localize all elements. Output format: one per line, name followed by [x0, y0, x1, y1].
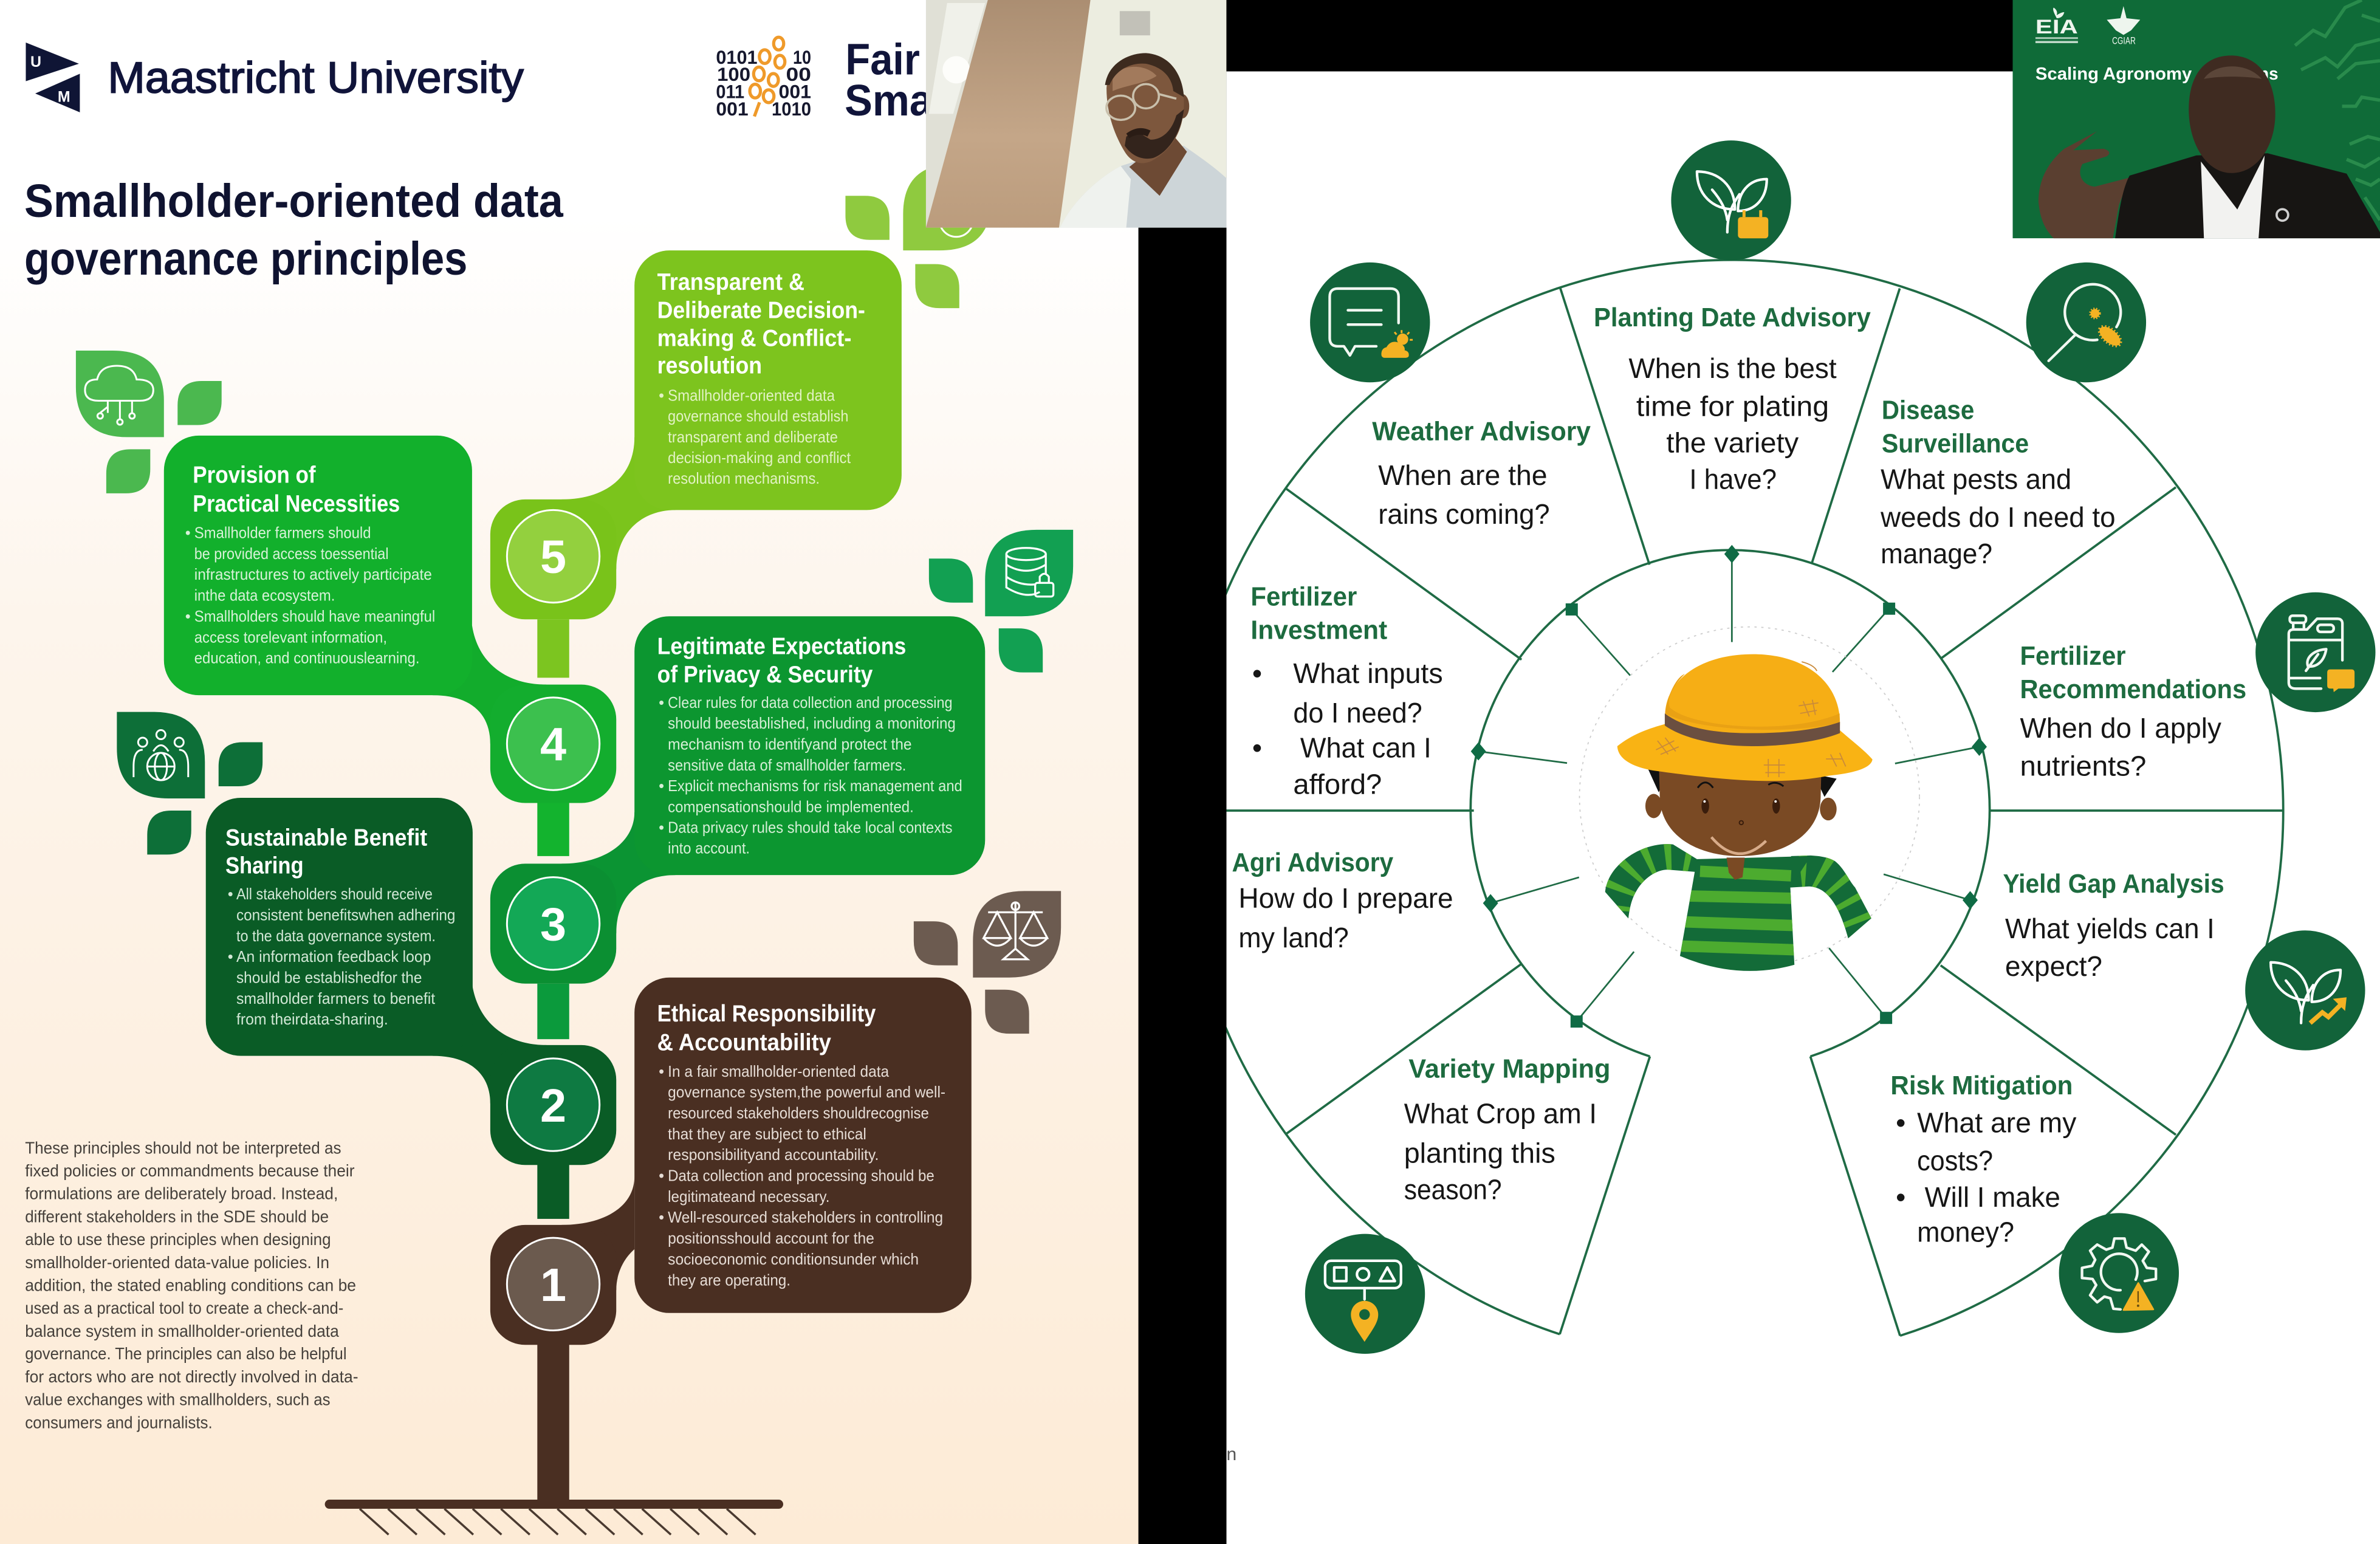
- body text: inthe data ecosystem.: [194, 588, 335, 605]
- section: fertilizer investment: Fertilizer: [1250, 582, 1357, 612]
- body text: be provided access toessential: [194, 546, 389, 563]
- section: planting date advisory: [1594, 303, 1871, 495]
- logos: EiA and CGIAR: EIA: [2035, 16, 2078, 38]
- section: disease surveillance: weeds do I need to: [1880, 501, 2116, 533]
- body text: All stakeholders should receive: [236, 886, 433, 903]
- text block: principles note: balance system in smallholder-oriented data: [25, 1322, 340, 1340]
- section: weather advisory: When are the: [1378, 459, 1548, 491]
- icon: database lock leaf: [929, 530, 1073, 673]
- body text: consistent benefitswhen adhering: [236, 907, 455, 924]
- body text: governance system,the powerful and well-: [668, 1084, 945, 1101]
- section: variety mapping: season?: [1404, 1173, 1502, 1205]
- body text: •: [659, 1209, 664, 1226]
- body text: compensationshould be implemented.: [668, 798, 914, 815]
- text block: principles note: used as a practical tool to create a check-and-: [25, 1299, 343, 1317]
- section: fertilizer recommendations: nutrients?: [2020, 750, 2146, 781]
- body text: Well-resourced stakeholders in controlling: [668, 1209, 943, 1226]
- logo: Maastricht University: [26, 43, 524, 112]
- principle 4: practical necessities: [76, 351, 616, 856]
- icon: risk mitigation: [2059, 1213, 2179, 1333]
- body text: should beestablished, including a monitoring: [668, 715, 956, 732]
- body text: that they are subject to ethical: [668, 1126, 866, 1143]
- body text: Smallholder-oriented data: [668, 387, 835, 404]
- section: risk mitigation: Will I make: [1925, 1181, 2060, 1213]
- logo: Maastricht University: Maastricht University: [108, 53, 524, 102]
- principle 2: sustainable benefit sharing: [117, 712, 616, 1219]
- section: weather advisory: rains coming?: [1378, 498, 1550, 530]
- body text: decision-making and conflict: [668, 450, 851, 467]
- section: weather advisory: [1372, 416, 1591, 530]
- section: planting date advisory: the variety: [1666, 427, 1799, 458]
- heading: [657, 634, 906, 688]
- body text: •: [659, 1063, 664, 1080]
- logo: Fair Smallholder binary: 00: [786, 63, 811, 85]
- body text: [659, 695, 962, 857]
- section: fertilizer recommendations: Recommendations: [2020, 674, 2246, 704]
- text block: principles note: governance. The principles can also be helpful: [25, 1344, 347, 1363]
- stray character at slide edge: n: [1226, 1444, 1236, 1464]
- heading: resolution: [657, 353, 762, 379]
- section: fertilizer investment: [1250, 582, 1443, 800]
- heading: Sharing: [225, 853, 304, 879]
- body text: •: [228, 886, 233, 903]
- body text: socioeconomic conditionsunder which: [668, 1251, 919, 1268]
- farmer right sleeve: [1790, 856, 1871, 938]
- section: agri advisory: Agri Advisory: [1232, 848, 1394, 877]
- body text: legitimateand necessary.: [668, 1189, 829, 1206]
- body text: from theirdata-sharing.: [236, 1011, 388, 1028]
- body text: positionsshould account for the: [668, 1230, 874, 1247]
- section: variety mapping: Variety Mapping: [1408, 1054, 1610, 1084]
- section: variety mapping: What Crop am I: [1404, 1098, 1597, 1130]
- section: risk mitigation: [1890, 1071, 2077, 1247]
- farmer left sleeve: [1605, 844, 1697, 919]
- heading: [193, 462, 400, 517]
- text block: principles note: addition, the stated enabling conditions can be: [25, 1275, 356, 1294]
- section: fertilizer investment: afford?: [1293, 768, 1382, 800]
- principle 5: transparent decision-making: [490, 164, 991, 678]
- section: agri advisory: How do I prepare: [1238, 882, 1453, 914]
- section: disease surveillance: What pests and: [1881, 463, 2071, 495]
- title: [24, 175, 564, 285]
- section: disease surveillance: Surveillance: [1882, 428, 2029, 458]
- section: yield gap analysis: Yield Gap Analysis: [2003, 869, 2224, 899]
- section: risk mitigation: Risk Mitigation: [1890, 1071, 2073, 1100]
- text block: principles note: value exchanges with smallholders, such as: [25, 1390, 331, 1409]
- body text: •: [659, 1167, 664, 1184]
- section: risk mitigation: What are my: [1917, 1107, 2077, 1139]
- section: planting date advisory: Planting Date Advisory: [1594, 303, 1871, 332]
- body text: Data collection and processing should be: [668, 1167, 935, 1184]
- body text: •: [185, 525, 191, 542]
- icon: scales leaf: [914, 891, 1061, 1034]
- heading: Legitimate Expectations: [657, 634, 906, 660]
- section: fertilizer investment: •: [1252, 732, 1262, 764]
- logo: Fair Smallholder binary: 011: [716, 80, 744, 102]
- section: agri advisory: [1232, 848, 1453, 953]
- heading: [657, 1001, 876, 1056]
- icon: planting date: [1671, 140, 1791, 260]
- section: fertilizer investment: What can I: [1300, 732, 1432, 764]
- text block: principles note: for actors who are not directly involved in data-: [25, 1367, 358, 1386]
- body text: to the data governance system.: [236, 928, 436, 945]
- title: Smallholder-oriented data: [24, 175, 564, 227]
- heading: Provision of: [193, 462, 316, 488]
- logo: Maastricht University: U: [30, 53, 41, 70]
- body text: [228, 886, 455, 1028]
- webcam banner text: Scaling Agronomy: [2035, 64, 2192, 84]
- body text: education, and continuouslearning.: [194, 650, 419, 667]
- presenter hand: [2039, 131, 2130, 238]
- body text: •: [659, 387, 664, 404]
- body text: Explicit mechanisms for risk management and: [668, 778, 962, 795]
- body text: Smallholder farmers should: [194, 525, 371, 542]
- body text: they are operating.: [668, 1272, 790, 1289]
- logos: EiA and CGIAR: CGIAR: [2112, 35, 2136, 46]
- farmer torso: [1679, 856, 1807, 971]
- text block: principles note: formulations are deliberately broad. Instead,: [25, 1184, 338, 1203]
- section: risk mitigation: costs?: [1917, 1145, 1993, 1176]
- tree trunk and ground: [325, 1336, 783, 1535]
- principle 3: privacy and security: [490, 530, 1073, 1039]
- section: variety mapping: planting this: [1404, 1137, 1555, 1168]
- logo: Fair Smallholder binary: 100: [717, 63, 750, 85]
- icon: fertilizer recommendations: [2255, 592, 2376, 712]
- body text: Data privacy rules should take local contexts: [668, 819, 953, 836]
- icon: yield gap: [2245, 930, 2365, 1051]
- principle 4: practical necessities: 4: [540, 719, 566, 771]
- section: risk mitigation: •: [1896, 1181, 1905, 1213]
- body text: •: [228, 949, 233, 966]
- logo: Maastricht University: M: [58, 88, 70, 105]
- logo: Fair Smallholder binary: Sma: [845, 76, 933, 125]
- heading: & Accountability: [657, 1030, 831, 1056]
- section: yield gap analysis: What yields can I: [2005, 913, 2215, 944]
- text block: principles note: able to use these principles when designing: [25, 1230, 331, 1249]
- body text: mechanism to identifyand protect the: [668, 736, 912, 753]
- body text: •: [185, 608, 191, 625]
- body text: [185, 525, 435, 667]
- section: planting date advisory: When is the best: [1628, 352, 1837, 384]
- body text: governance should establish: [668, 408, 848, 425]
- webcam: presenter two: [2012, 0, 2380, 238]
- title: governance principles: [24, 233, 467, 285]
- section: fertilizer investment: do I need?: [1293, 697, 1422, 729]
- section: risk mitigation: money?: [1917, 1216, 2014, 1247]
- illustration: farmer: [1594, 654, 1878, 979]
- body text: access torelevant information,: [194, 629, 387, 646]
- heading: making & Conflict-: [657, 326, 851, 352]
- logo: Fair Smallholder binary: 001: [779, 80, 811, 102]
- body text: into account.: [668, 840, 750, 857]
- principle 1: ethical responsibility: [490, 891, 1061, 1345]
- principle 1: ethical responsibility: 1: [540, 1259, 566, 1311]
- section: fertilizer recommendations: Fertilizer: [2020, 641, 2126, 671]
- wheel node markers: [1471, 545, 1987, 1028]
- principle 3: privacy and security: 3: [540, 899, 566, 951]
- icon: variety mapping: [1305, 1234, 1425, 1354]
- section: yield gap analysis: [2003, 869, 2224, 982]
- section: weather advisory: Weather Advisory: [1372, 416, 1591, 446]
- section: planting date advisory: time for plating: [1636, 390, 1829, 422]
- body text: [659, 1063, 945, 1289]
- body text: sensitive data of smallholder farmers.: [668, 757, 906, 774]
- logo: Fair Smallholder binary: 0101: [716, 46, 758, 68]
- presenter head: [1176, 94, 1189, 118]
- body text: •: [659, 819, 664, 836]
- section: disease surveillance: [1880, 395, 2116, 569]
- panel: data governance poster: [0, 0, 1139, 1544]
- heading: Transparent &: [657, 269, 804, 295]
- heading: [225, 825, 427, 879]
- section: variety mapping: [1404, 1054, 1610, 1205]
- section: fertilizer investment: Investment: [1250, 616, 1388, 645]
- heading: Practical Necessities: [193, 491, 400, 517]
- text block: principles note: fixed policies or commandments because their: [25, 1161, 355, 1180]
- body text: responsibilityand accountability.: [668, 1147, 879, 1164]
- webcam: presenter two: ns: [2258, 64, 2279, 84]
- body text: should be establishedfor the: [236, 969, 422, 986]
- body text: Smallholders should have meaningful: [194, 608, 435, 625]
- body text: •: [659, 695, 664, 712]
- icon: weather: [1310, 262, 1430, 382]
- section: risk mitigation: •: [1896, 1107, 1905, 1139]
- logo: Fair Smallholder binary: 10: [793, 46, 811, 68]
- section: planting date advisory: I have?: [1689, 463, 1777, 495]
- section: fertilizer recommendations: When do I apply: [2020, 712, 2222, 744]
- text block: principles note: consumers and journalists.: [25, 1413, 213, 1432]
- section: agri advisory: my land?: [1238, 922, 1349, 953]
- webcam: presenter one: [926, 0, 1226, 228]
- section: fertilizer investment: What inputs: [1293, 657, 1443, 689]
- heading: Deliberate Decision-: [657, 297, 865, 323]
- body text: resourced stakeholders shouldrecognise: [668, 1105, 929, 1122]
- text block: principles note: [25, 1139, 358, 1432]
- body text: In a fair smallholder-oriented data: [668, 1063, 890, 1080]
- section: yield gap analysis: expect?: [2005, 950, 2102, 982]
- presenter shirt: [1060, 146, 1226, 228]
- black bar above wheel: [1226, 0, 2012, 71]
- panel: agronomy advisory wheel: [1181, 71, 2380, 1544]
- principle 5: transparent decision-making: 5: [540, 531, 566, 583]
- logo: Fair Smallholder binary: 001: [716, 98, 749, 120]
- icon: disease surveillance: [2026, 262, 2146, 382]
- logo: Fair Smallholder binary: [716, 35, 933, 125]
- heading: of Privacy & Security: [657, 662, 873, 688]
- icon: cloud network leaf: [76, 351, 222, 493]
- text block: principles note: These principles should not be interpreted as: [25, 1139, 341, 1158]
- wheel outlines: [1181, 260, 2283, 1336]
- section: disease surveillance: manage?: [1881, 538, 1992, 569]
- body text: •: [659, 778, 664, 795]
- body text: infrastructures to actively participate: [194, 566, 432, 583]
- section: fertilizer recommendations: [2020, 641, 2246, 781]
- heading: Ethical Responsibility: [657, 1001, 876, 1027]
- principle 2: sustainable benefit sharing: 2: [540, 1080, 566, 1132]
- heading: Sustainable Benefit: [225, 825, 427, 851]
- logo: Fair Smallholder binary: Fair: [845, 35, 920, 84]
- icon: globe people leaf: [117, 712, 262, 854]
- dotted ring: [1580, 627, 1919, 967]
- logo: Fair Smallholder binary: 1010: [772, 98, 811, 120]
- logos: EiA and CGIAR: [2035, 6, 2140, 46]
- body text: smallholder farmers to benefit: [236, 990, 435, 1007]
- body text: Clear rules for data collection and processing: [668, 695, 953, 712]
- circuit pattern: [2295, 0, 2380, 220]
- body text: An information feedback loop: [236, 949, 431, 966]
- section: disease surveillance: Disease: [1882, 395, 1974, 425]
- heading: [657, 269, 865, 379]
- body text: transparent and deliberate: [668, 429, 838, 446]
- section: fertilizer investment: •: [1252, 657, 1262, 689]
- icon: discussion leaf: [845, 164, 991, 308]
- body text: [659, 387, 851, 487]
- text block: principles note: different stakeholders in the SDE should be: [25, 1207, 329, 1226]
- text block: principles note: smallholder-oriented data-value policies. In: [25, 1253, 329, 1272]
- presenter suit: [2115, 153, 2380, 238]
- body text: resolution mechanisms.: [668, 470, 820, 487]
